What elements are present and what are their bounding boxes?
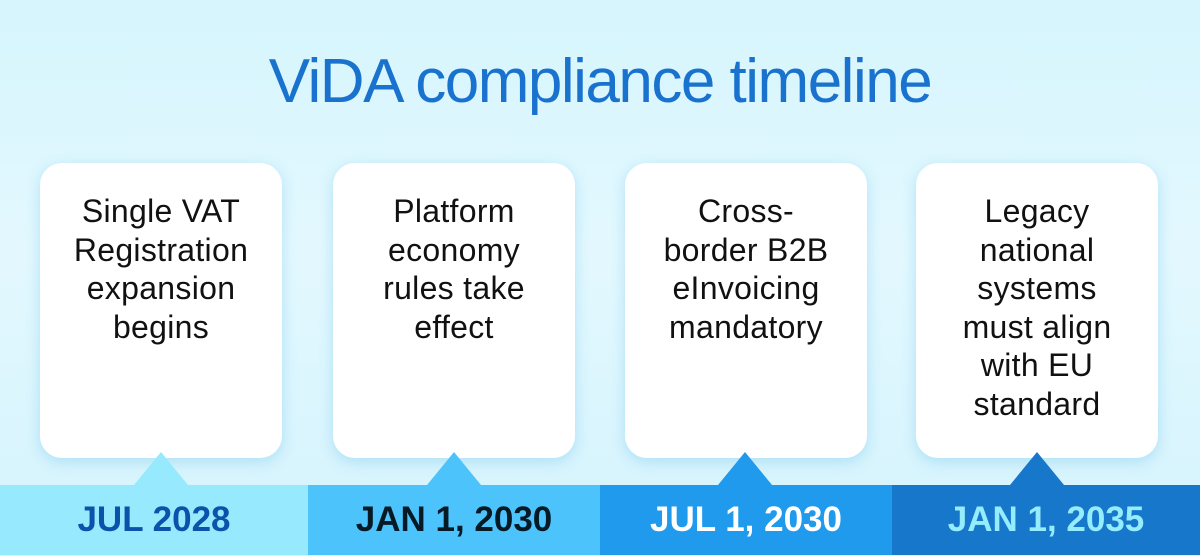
band: JAN 1, 2035: JAN 1, 2035 — [948, 500, 1144, 539]
band: JUL 2028: JUL 2028 — [77, 500, 231, 539]
card: legacy national systems: standard — [974, 386, 1100, 422]
card: legacy national systems: must align — [963, 308, 1111, 344]
card: single VAT registration — [40, 163, 282, 458]
card: platform economy: effect — [414, 308, 494, 344]
card: single VAT registration: Registration — [74, 232, 248, 268]
title: ViDA compliance timeline — [269, 47, 931, 116]
card: legacy national systems: Legacy — [984, 193, 1090, 229]
card: legacy national systems: systems — [977, 270, 1097, 306]
pointer 1 — [134, 452, 188, 485]
pointer 2 — [427, 452, 481, 485]
card: single VAT registration: begins — [113, 308, 209, 344]
pointer 4 — [1010, 452, 1064, 485]
card: cross-border eInvoicing: mandatory — [669, 308, 823, 344]
card: platform economy: economy — [388, 232, 520, 268]
band: JUL 1, 2030: JUL 1, 2030 — [650, 500, 842, 539]
band: JAN 1, 2035 — [892, 485, 1200, 555]
card: legacy national systems: with EU — [981, 347, 1093, 383]
card: cross-border eInvoicing: Cross- — [698, 193, 794, 229]
band: JAN 1, 2030: JAN 1, 2030 — [356, 500, 552, 539]
card: legacy national systems — [916, 163, 1158, 458]
card: cross-border eInvoicing: eInvoicing — [672, 270, 820, 306]
band: JUL 2028 — [0, 485, 308, 555]
card: platform economy: Platform — [393, 193, 515, 229]
card: single VAT registration: Single VAT — [82, 193, 240, 229]
band: JAN 1, 2030 — [308, 485, 600, 555]
card: platform economy — [333, 163, 575, 458]
card: platform economy: rules take — [383, 270, 525, 306]
pointer 3 — [718, 452, 772, 485]
card: cross-border eInvoicing — [625, 163, 867, 458]
card: legacy national systems: national — [980, 232, 1094, 268]
band: JUL 1, 2030 — [600, 485, 892, 555]
card: cross-border eInvoicing: border B2B — [664, 232, 828, 268]
card: single VAT registration: expansion — [87, 270, 235, 306]
